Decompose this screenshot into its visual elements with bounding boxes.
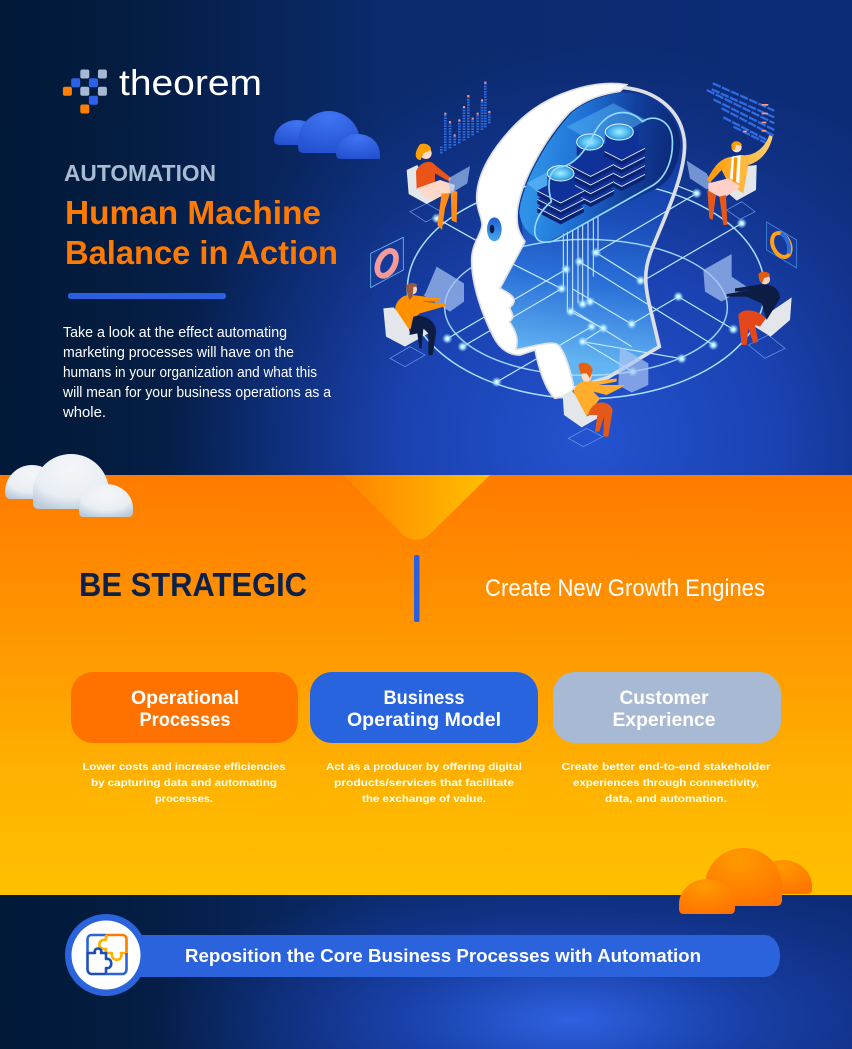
table highlights	[743, 104, 768, 132]
card: business operating model: Business	[384, 688, 464, 709]
text: customer description: Create better end-to-end stakeholder	[562, 761, 770, 773]
card: customer experience	[553, 672, 781, 743]
circuit nodes	[431, 188, 747, 387]
cloud: orange	[679, 848, 812, 914]
background: footer glow	[0, 895, 852, 1049]
arrow: section pointer	[343, 475, 490, 540]
panel: pink donut	[371, 237, 403, 288]
text: business model description: Act as a producer by offering digital	[326, 761, 522, 773]
intro paragraph: marketing processes will have on the	[63, 345, 294, 361]
server stack middle	[567, 134, 614, 207]
banner text: Reposition the Core Business Processes with Automation	[185, 945, 701, 966]
text: business model description: products/services that facilitate	[334, 777, 514, 789]
person: left man	[383, 267, 464, 367]
banner pill	[135, 935, 780, 977]
server stack right	[598, 124, 645, 191]
heading: main title: Balance in Action	[65, 234, 338, 271]
card: operational processes: Operational	[131, 688, 239, 709]
text: operational description: processes.	[155, 793, 213, 805]
card: operational processes	[71, 672, 298, 743]
card: operational processes: Processes	[140, 710, 230, 731]
cloud outline	[535, 112, 672, 242]
server stack left	[537, 166, 584, 224]
intro paragraph: will mean for your business operations as a	[62, 385, 332, 401]
logo: theorem	[63, 62, 262, 114]
face interior	[500, 91, 683, 388]
person: right man	[703, 254, 792, 358]
person: top right man	[687, 135, 773, 225]
data table hologram	[707, 83, 774, 144]
bar chart hologram	[441, 82, 489, 153]
intro paragraph: whole.	[62, 405, 106, 421]
circuit lines	[437, 185, 742, 382]
text: operational description: by capturing data and automating	[91, 777, 277, 789]
subheading: growth engines: Create New Growth Engines	[485, 575, 765, 602]
text: customer description	[562, 761, 770, 805]
divider	[414, 555, 420, 622]
inner ring	[445, 239, 727, 375]
intro paragraph	[62, 325, 332, 421]
brain cavity	[519, 93, 680, 242]
white face	[472, 84, 627, 398]
data lines from brain	[563, 217, 598, 312]
logo wordmark: theorem	[119, 62, 262, 103]
text: business model description	[326, 761, 522, 805]
brain highlight panels	[527, 103, 647, 202]
intro paragraph: Take a look at the effect automating	[63, 325, 287, 341]
outer ring	[407, 180, 765, 399]
server stacks	[537, 124, 645, 224]
background: orange section	[0, 475, 852, 895]
illustration: AI head with people and circuit	[371, 82, 797, 447]
head rim	[573, 87, 685, 388]
card: business operating model	[310, 672, 538, 743]
background: footer section	[0, 895, 852, 1049]
cloud: white	[5, 454, 133, 517]
text: business model description: the exchange of value.	[362, 793, 486, 805]
heading: main title: Human Machine	[65, 194, 321, 231]
puzzle pieces	[88, 935, 126, 974]
panel: orange donut	[767, 222, 797, 268]
bar chart tips	[444, 82, 490, 136]
intro paragraph: humans in your organization and what this	[63, 365, 317, 381]
icon: eye	[487, 217, 502, 241]
cloud: blue	[274, 111, 380, 159]
heading: be strategic: BE STRATEGIC	[79, 566, 307, 603]
person: bottom woman	[563, 347, 648, 447]
background: top blue glow	[0, 0, 852, 475]
card: customer experience: Experience	[612, 710, 716, 731]
heading: automation: AUTOMATION	[64, 160, 216, 186]
accent bar	[68, 293, 226, 299]
card: customer experience: Customer	[620, 688, 709, 709]
footer banner	[65, 914, 780, 996]
text: operational description: Lower costs and increase efficiencies	[82, 761, 286, 773]
text: operational description	[82, 761, 286, 805]
card: business operating model: Operating Model	[347, 710, 501, 731]
person: top left woman	[407, 144, 470, 230]
text: customer description: data, and automation.	[605, 793, 727, 805]
background: top blue section	[0, 0, 852, 475]
icon: logo pixel mark	[63, 70, 107, 114]
icon: puzzle badge	[65, 914, 147, 996]
heading: main title	[65, 194, 338, 271]
text: customer description: experiences through connectivity,	[573, 777, 759, 789]
